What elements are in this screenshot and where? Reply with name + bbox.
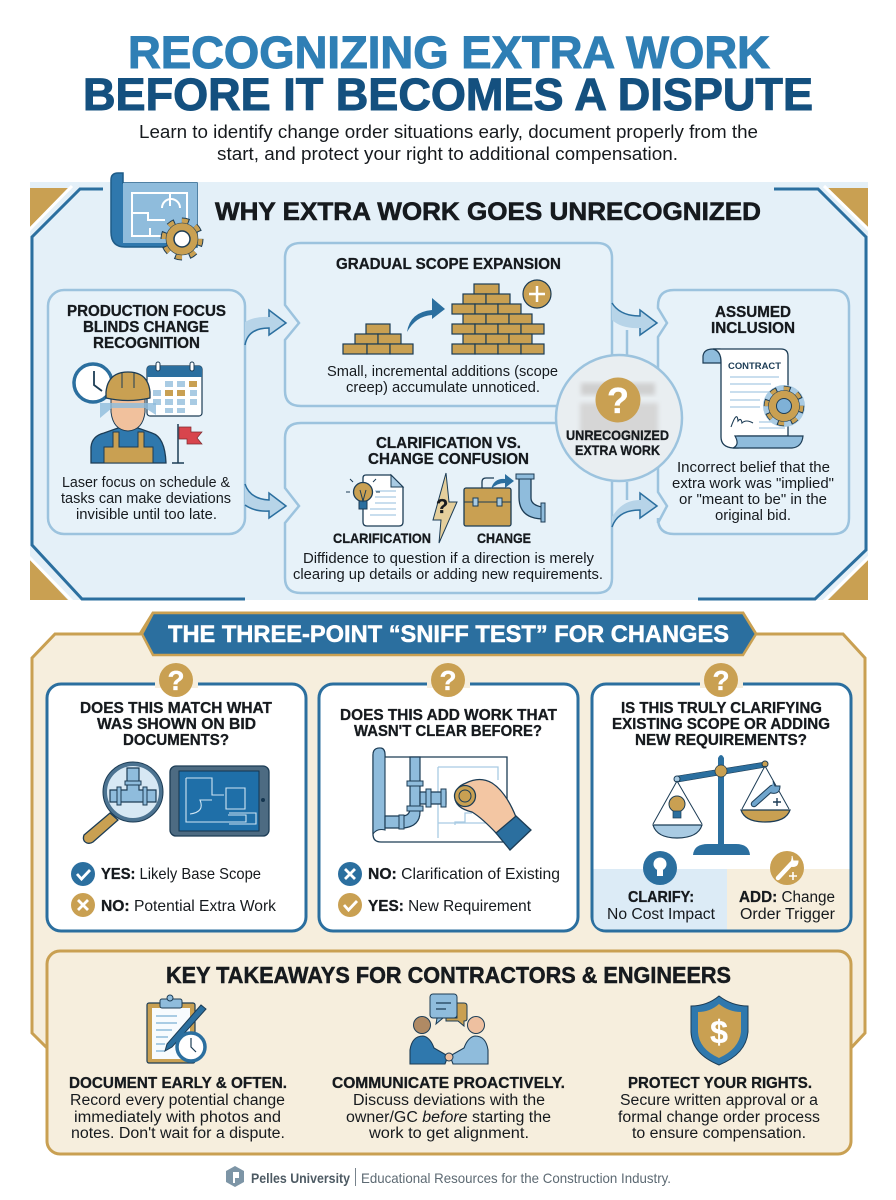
check item: YES: New Requirement — [368, 898, 532, 915]
arrow: clarification to assumed inclusion — [612, 493, 657, 527]
text: document early and often: DOCUMENT EARLY & OFTEN. — [69, 1075, 287, 1092]
card: clarification vs change confusion — [285, 423, 612, 593]
icon: growth arrow — [407, 298, 445, 332]
hub: unrecognized extra work: ? — [607, 380, 629, 421]
icon: blueprint and gear — [111, 173, 200, 257]
icon: blueprint with pipe and hand — [373, 748, 531, 850]
card: production focus: PRODUCTION FOCUS — [67, 303, 226, 320]
arrow: production focus to scope expansion — [245, 310, 286, 345]
icon: question badge — [431, 663, 465, 697]
text: document early and often: notes. Don't wait for a dispute. — [71, 1125, 285, 1142]
icon: contract scroll with gear — [703, 349, 805, 448]
panel: why extra work goes unrecognized — [29, 173, 869, 601]
footer: Educational Resources for the Construction Industry. — [361, 1170, 671, 1186]
card: production focus: Laser focus on schedule & — [62, 474, 230, 491]
footer: Pelles University — [251, 1170, 350, 1186]
text: protect your rights: formal change order process — [618, 1109, 820, 1126]
text: protect your rights: to ensure compensation. — [632, 1125, 806, 1142]
banner heading: THE THREE-POINT “SNIFF TEST” FOR CHANGES — [168, 621, 729, 648]
text: document early and often — [69, 1075, 287, 1142]
icon: tablet with blueprint — [170, 766, 269, 836]
icon: clipboard with pen and stopwatch — [147, 995, 206, 1063]
icon: contract scroll with gear: CONTRACT — [728, 361, 781, 372]
text: communicate proactively: Discuss deviations with the — [353, 1092, 545, 1109]
icon: lightning with question mark — [433, 473, 457, 543]
panel heading: WHY EXTRA WORK GOES UNRECOGNIZED — [215, 198, 761, 226]
icon: magnifier over pipe fitting — [83, 762, 163, 843]
title: RECOGNIZING EXTRA WORK — [128, 27, 771, 78]
text: document early and often: Record every potential change — [70, 1092, 285, 1109]
icon: handshake with speech bubbles — [410, 994, 488, 1064]
banner heading — [142, 613, 756, 655]
card: does this add work: DOES THIS ADD WORK THAT — [340, 707, 558, 724]
title: BEFORE IT BECOMES A DISPUTE — [83, 69, 813, 120]
icon: toolbox and pipe — [464, 474, 545, 526]
card: assumed inclusion: ASSUMED — [715, 304, 791, 321]
outcome: add: ADD: Change — [739, 889, 835, 906]
panel: three-point sniff test — [32, 613, 865, 1154]
text: protect your rights: Secure written approval or a — [620, 1092, 818, 1109]
card: assumed inclusion: or "meant to be" in the — [679, 491, 827, 508]
subtitle: start, and protect your right to additional compensation. — [217, 143, 678, 164]
cross item — [71, 893, 277, 917]
icon: question badge: ? — [712, 665, 730, 696]
card: gradual scope expansion: Small, incremental additions (scope — [327, 363, 558, 380]
check item — [71, 862, 261, 886]
cross item: NO: Potential Extra Work — [101, 898, 277, 915]
outcome: clarify — [594, 851, 727, 930]
card: clarification vs change confusion: clearing up details or adding new requirements. — [293, 566, 603, 583]
card: production focus — [48, 290, 245, 534]
card: does this add work: WASN'T CLEAR BEFORE? — [354, 723, 542, 740]
footer — [226, 1166, 671, 1187]
card: clarification vs change confusion: CHANGE CONFUSION — [368, 451, 529, 468]
text: communicate proactively: work to get alignment. — [368, 1125, 529, 1142]
panel: key takeaways: KEY TAKEAWAYS FOR CONTRACTORS & ENGINEERS — [166, 962, 731, 988]
text: protect your rights — [618, 1075, 820, 1142]
card: truly clarifying or adding: IS THIS TRULY CLARIFYING — [621, 700, 822, 717]
card: production focus: invisible until too late. — [76, 506, 217, 523]
panel: key takeaways — [47, 951, 851, 1154]
hub: unrecognized extra work — [556, 355, 682, 481]
icon: shield with dollar sign — [691, 996, 748, 1065]
card: clarification vs change confusion: CHANGE — [477, 530, 531, 546]
hub: unrecognized extra work: UNRECOGNIZED — [566, 427, 669, 443]
card: truly clarifying or adding: NEW REQUIREMENTS? — [635, 732, 807, 749]
arrow: production focus to clarification — [245, 484, 286, 518]
icon: worker with clock, calendar and flag — [74, 362, 202, 463]
connector lines — [626, 330, 628, 500]
cross item: NO: Clarification of Existing — [368, 866, 560, 883]
arrow: scope expansion to assumed inclusion — [612, 303, 657, 335]
card: assumed inclusion — [658, 290, 849, 534]
card: does this match — [47, 663, 306, 931]
card: gradual scope expansion: creep) accumulate unnoticed. — [346, 379, 540, 396]
check item — [338, 893, 532, 917]
icon: Pelles logo — [226, 1166, 244, 1187]
text: protect your rights: PROTECT YOUR RIGHTS. — [628, 1075, 812, 1092]
card: does this match: WAS SHOWN ON BID — [97, 716, 256, 733]
cross item — [338, 862, 560, 886]
icon: balance scale — [653, 755, 790, 855]
icon: question badge — [159, 663, 193, 697]
subtitle: Learn to identify change order situations early, document properly from the — [139, 121, 758, 142]
card: gradual scope expansion — [285, 243, 612, 406]
outcome: clarify: CLARIFY: — [628, 889, 694, 906]
outcome: add — [727, 851, 850, 930]
icon: plus badge — [523, 280, 551, 308]
icon: large brick wall — [452, 284, 544, 354]
card: truly clarifying or adding — [592, 663, 851, 931]
title — [83, 27, 813, 120]
icon: small brick stack — [343, 324, 413, 354]
icon: shield with dollar sign: $ — [710, 1014, 728, 1050]
outcome: add: Order Trigger — [740, 906, 835, 923]
card: assumed inclusion: original bid. — [715, 507, 791, 524]
icon: lightning with question mark: ? — [436, 496, 448, 518]
card: assumed inclusion: INCLUSION — [711, 320, 795, 337]
text: communicate proactively: owner/GC before starting the — [346, 1109, 551, 1126]
card: assumed inclusion: extra work was "implied" — [672, 475, 834, 492]
card: truly clarifying or adding: EXISTING SCOPE OR ADDING — [612, 716, 830, 733]
icon: question badge — [704, 663, 738, 697]
icon: question badge: ? — [167, 665, 185, 696]
card: clarification vs change confusion: CLARIFICATION VS. — [376, 435, 521, 452]
card: clarification vs change confusion: Diffidence to question if a direction is merely — [303, 550, 594, 567]
outcome: clarify: No Cost Impact — [607, 906, 716, 923]
check item: YES: Likely Base Scope — [101, 866, 261, 883]
card: clarification vs change confusion: CLARIFICATION — [333, 530, 431, 546]
card: gradual scope expansion: GRADUAL SCOPE EXPANSION — [336, 256, 561, 273]
card: does this match: DOCUMENTS? — [123, 732, 229, 749]
subtitle — [139, 121, 758, 164]
card: does this match: DOES THIS MATCH WHAT — [80, 700, 273, 717]
card: production focus: RECOGNITION — [93, 335, 200, 352]
icon: document with lightbulb — [346, 475, 403, 526]
card: assumed inclusion: Incorrect belief that the — [677, 459, 830, 476]
hub: unrecognized extra work: EXTRA WORK — [575, 442, 660, 458]
card: does this add work — [319, 663, 578, 931]
text: communicate proactively — [332, 1075, 565, 1142]
icon: question badge: ? — [439, 665, 457, 696]
card: production focus: BLINDS CHANGE — [83, 319, 209, 336]
card: production focus: tasks can make deviations — [61, 490, 231, 507]
text: document early and often: immediately with photos and — [74, 1109, 281, 1126]
text: communicate proactively: COMMUNICATE PROACTIVELY. — [332, 1075, 565, 1092]
